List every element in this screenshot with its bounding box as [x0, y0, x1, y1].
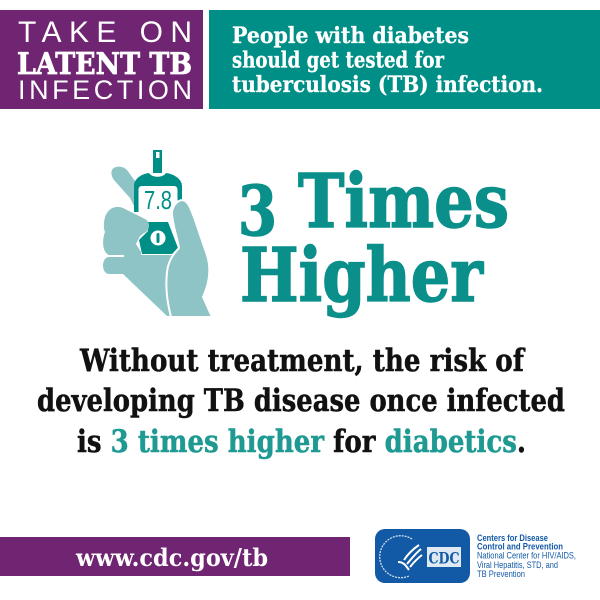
fingers and palm — [103, 207, 178, 316]
message text: People with diabetes — [232, 23, 469, 49]
meter upper body — [134, 173, 182, 212]
title: latent tb: LATENT TB — [17, 47, 192, 82]
title: take on: TAKE ON — [18, 16, 192, 49]
logo seal ring — [380, 536, 412, 578]
index finger — [111, 167, 135, 208]
body statement — [37, 343, 565, 460]
test strip — [153, 150, 162, 174]
website url: www.cdc.gov/tb — [75, 543, 268, 572]
agency text: National Center for HIV/AIDS, — [477, 550, 576, 560]
logo: CDC — [375, 529, 470, 583]
message text: tuberculosis (TB) infection. — [232, 72, 543, 98]
meter lower body — [139, 222, 178, 254]
agency text — [477, 533, 576, 579]
agency text: Centers for Disease — [477, 533, 548, 543]
panel: title banner — [0, 10, 203, 109]
big statistic heading: Higher — [240, 233, 484, 319]
thumb and wrist — [166, 200, 212, 317]
panel: teal message banner — [209, 10, 600, 109]
agency text: Control and Prevention — [477, 542, 563, 552]
agency text: TB Prevention — [477, 569, 525, 579]
agency text: Viral Hepatitis, STD, and — [477, 560, 558, 570]
body statement: is 3 times higher for diabetics. — [77, 424, 526, 460]
message text: should get tested for — [232, 48, 444, 74]
big statistic heading — [238, 159, 509, 319]
meter reading: 7.8 — [144, 185, 172, 215]
body statement: Without treatment, the risk of — [79, 343, 525, 379]
logo wordmark: CDC — [428, 548, 460, 568]
big statistic heading: Times — [298, 159, 509, 245]
title: infection: INFECTION — [18, 75, 192, 105]
meter screen — [138, 186, 178, 223]
big statistic heading: 3 — [238, 172, 277, 252]
wrist edge mask — [120, 316, 220, 320]
message text — [232, 23, 543, 98]
panel: website bar — [0, 537, 350, 576]
icon: hand holding glucose meter — [103, 150, 220, 320]
logo bird — [398, 545, 422, 570]
